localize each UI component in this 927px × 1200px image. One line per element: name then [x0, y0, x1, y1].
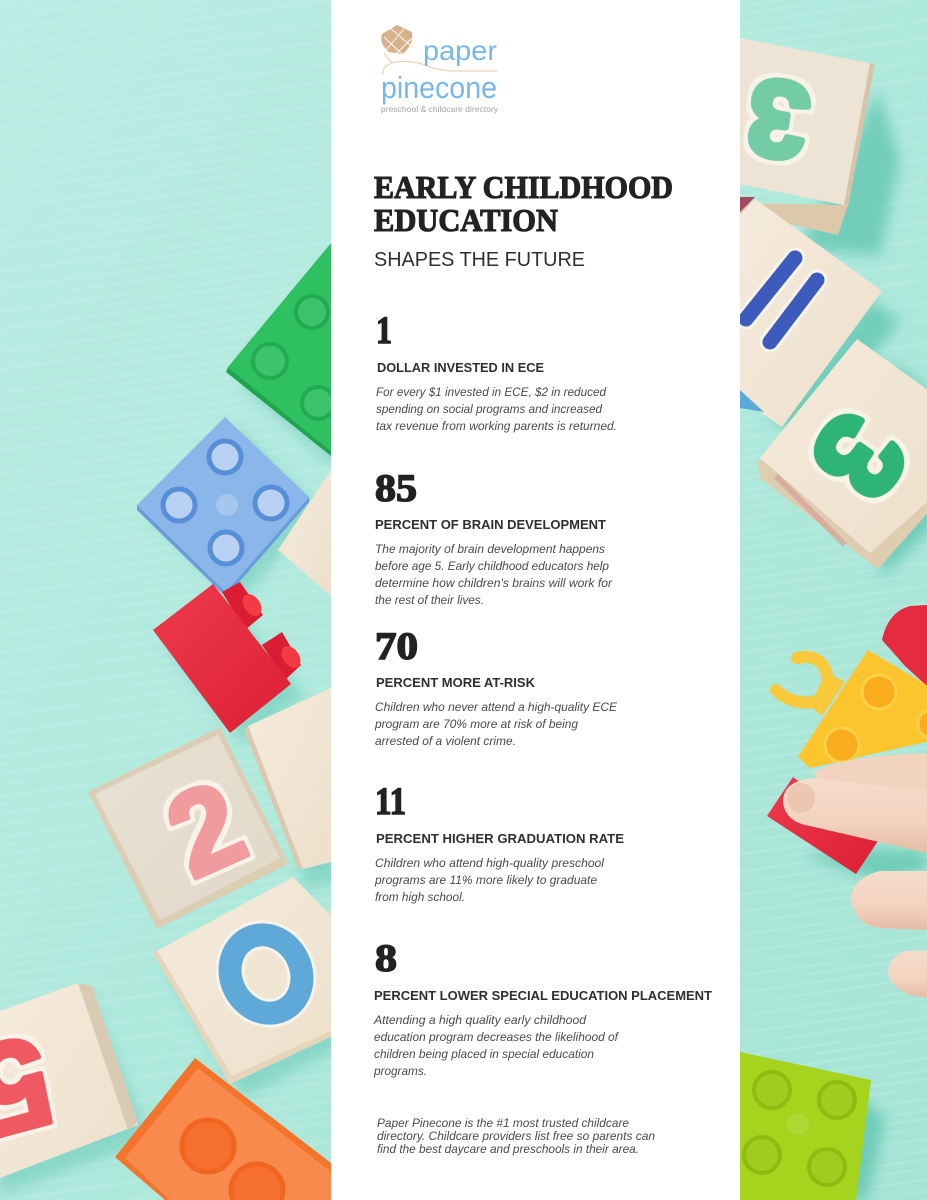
footer note: find the best daycare and preschools in their area. — [377, 1142, 639, 1156]
stat: 11 percent: 11 — [375, 780, 406, 823]
red stud top right — [882, 605, 927, 686]
stat: 85 percent: 85 — [375, 467, 417, 510]
white center panel — [331, 0, 740, 1200]
wood block behind blue — [278, 470, 331, 596]
green brick — [226, 243, 334, 456]
logo: pinecone — [381, 70, 497, 105]
stat: 70 percent — [374, 625, 618, 748]
wood block 3 — [740, 38, 875, 235]
stat: 1 dollar: spending on social programs and increased — [376, 402, 602, 416]
stat: 85 percent: before age 5. Early childhood educators help — [375, 559, 609, 573]
stat: 8 percent: education program decreases the likelihood of — [374, 1030, 620, 1044]
logo — [381, 25, 498, 114]
title: EDUCATION — [374, 202, 558, 238]
stat: 85 percent: The majority of brain development happens — [375, 542, 605, 556]
wood block 2: 2 — [149, 756, 263, 903]
stat: 11 percent: Children who attend high-quality preschool — [375, 856, 604, 870]
stat: 1 dollar — [376, 309, 617, 433]
stat: 8 percent: children being placed in special education — [374, 1047, 594, 1061]
red cylinder — [767, 777, 878, 874]
stat: 11 percent: PERCENT HIGHER GRADUATION RATE — [376, 832, 624, 846]
stat: 1 dollar: For every $1 invested in ECE, $2 in reduced — [376, 385, 606, 399]
stat: 85 percent: determine how children's brains will work for — [375, 576, 613, 590]
orange brick — [115, 1058, 340, 1200]
stat: 70 percent: PERCENT MORE AT-RISK — [376, 676, 535, 690]
subtitle: SHAPES THE FUTURE — [374, 248, 585, 271]
toy shadows — [0, 382, 331, 1197]
stat: 1 dollar: DOLLAR INVESTED IN ECE — [377, 361, 544, 375]
logo: preschool & childcare directory — [381, 105, 498, 114]
stat: 1 dollar: tax revenue from working parents is returned. — [376, 419, 617, 433]
wood block 0 — [153, 877, 345, 1084]
stat: 8 percent: 8 — [375, 937, 397, 980]
icon: pinecone — [381, 25, 412, 54]
stat: 70 percent: Children who never attend a high-quality ECE — [375, 700, 618, 714]
footer note: directory. Childcare providers list free so parents can — [377, 1129, 655, 1143]
stat: 70 percent: program are 70% more at risk of being — [374, 717, 578, 731]
wood block 2 — [88, 727, 289, 929]
wood block beside 2 — [244, 688, 331, 869]
wood block 5 — [0, 983, 138, 1178]
stat: 11 percent — [374, 780, 624, 904]
wood block green 3 — [757, 339, 927, 569]
yellow brick with claw — [776, 650, 927, 768]
logo: paper — [423, 35, 497, 66]
stat: 70 percent: 70 — [375, 625, 418, 668]
pink block edge — [740, 197, 755, 212]
title — [374, 169, 673, 238]
stat: 11 percent: from high school. — [375, 890, 465, 904]
blue brick — [137, 417, 309, 597]
hand fingers — [783, 753, 927, 998]
wood block 3: 3 — [740, 55, 816, 184]
stat: 8 percent: programs. — [373, 1064, 427, 1078]
title: EARLY CHILDHOOD — [374, 169, 673, 205]
stat: 70 percent: arrested of a violent crime. — [375, 734, 516, 748]
stat: 8 percent: Attending a high quality early childhood — [373, 1013, 586, 1027]
stat: 85 percent: PERCENT OF BRAIN DEVELOPMENT — [375, 518, 606, 532]
right toy collage — [740, 38, 927, 1200]
icon: branch — [383, 53, 497, 75]
stat: 85 percent: the rest of their lives. — [375, 593, 484, 607]
stat: 11 percent: programs are 11% more likely to graduate — [374, 873, 597, 887]
wood block equals — [740, 199, 882, 427]
lime brick — [740, 1052, 871, 1200]
footer note: Paper Pinecone is the #1 most trusted childcare — [377, 1116, 629, 1130]
red brick — [153, 582, 304, 733]
footer note — [377, 1116, 655, 1156]
stat: 85 percent — [375, 467, 613, 607]
stat: 8 percent: PERCENT LOWER SPECIAL EDUCATION PLACEMENT — [374, 989, 712, 1003]
small block edge — [328, 911, 331, 916]
stat: 8 percent — [373, 937, 712, 1078]
toy shadows — [770, 90, 927, 1200]
left toy collage — [0, 243, 345, 1200]
stat: 1 dollar: 1 — [376, 309, 392, 352]
